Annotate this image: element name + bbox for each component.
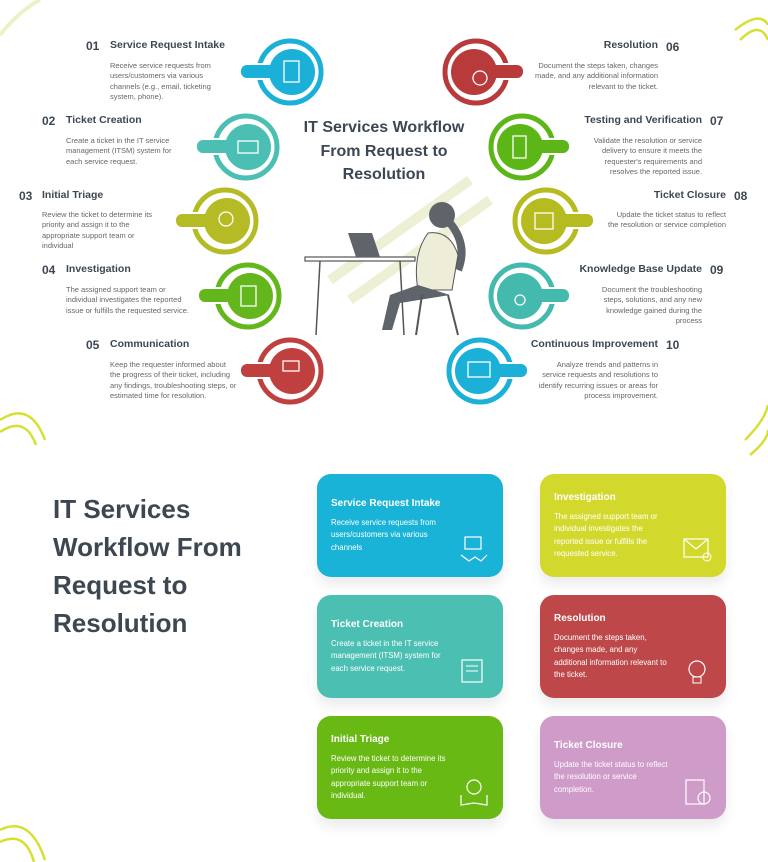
card: Investigation: The assigned support team or individual investigates the reported issue or fulfills the requested service.	[554, 512, 658, 558]
step 02	[42, 114, 172, 166]
text: 06	[666, 40, 679, 54]
text: Knowledge Base Update	[579, 263, 702, 275]
card: Service Request Intake	[317, 474, 503, 577]
text: 07	[710, 114, 723, 128]
text: 02	[42, 114, 55, 128]
card: Resolution: Resolution	[554, 613, 606, 624]
card: Ticket Closure: Update the ticket status to reflect the resolution or service completion.	[554, 760, 668, 794]
text: 03	[19, 189, 32, 203]
card: Initial Triage: Review the ticket to determine its priority and assign it to the appropriate support team or individual.	[331, 754, 445, 800]
text: 10	[666, 338, 679, 352]
card: Initial Triage: Initial Triage	[331, 734, 389, 745]
text: Keep the requester informed about the progress of their ticket, including any findings, troubleshooting steps, or estimated time for resolution.	[110, 360, 236, 400]
text: Validate the resolution or service delivery to ensure it meets the requester's requirements and resolves the reported issue.	[594, 136, 702, 176]
step 04	[42, 263, 189, 315]
card: Service Request Intake: Receive service requests from users/customers via various channels	[331, 518, 436, 552]
card: Resolution: Document the steps taken, changes made, and any additional information relevant to the ticket.	[554, 633, 667, 679]
card: Investigation	[540, 474, 726, 577]
card: Investigation: Investigation	[554, 492, 616, 503]
step 09	[579, 263, 723, 325]
text: Update the ticket status to reflect the resolution or service completion	[608, 210, 726, 229]
text: 01	[86, 39, 99, 53]
text: Document the steps taken, changes made, and any additional information relevant to the ticket.	[535, 61, 658, 91]
text: Investigation	[66, 263, 131, 275]
circles: workflow icons	[176, 38, 593, 404]
text: Analyze trends and patterns in service requests and resolutions to identify recurring issues or areas for process improvement.	[539, 360, 658, 400]
text: Ticket Creation	[66, 114, 142, 126]
title: bottom: IT Services Workflow From Request to Resolution	[53, 494, 242, 638]
text: 04	[42, 263, 55, 277]
text: Create a ticket in the IT service management (ITSM) system for each service request.	[66, 136, 171, 166]
text: Communication	[110, 338, 189, 350]
step 06	[535, 39, 679, 91]
text: Receive service requests from users/customers via various channels (e.g., email, ticketing system, phone).	[110, 61, 211, 101]
card: Ticket Creation: Create a ticket in the IT service management (ITSM) system for each service request.	[331, 639, 441, 673]
step 01	[86, 39, 225, 101]
text: Service Request Intake	[110, 39, 225, 51]
text: Document the troubleshooting steps, solutions, and any new knowledge gained during the process	[602, 285, 702, 325]
text: Resolution	[604, 39, 658, 51]
card: Service Request Intake: Service Request Intake	[331, 498, 440, 509]
text: Ticket Closure	[654, 189, 726, 201]
text: The assigned support team or individual investigates the reported issue or fulfills the requested service.	[66, 285, 189, 315]
text: 05	[86, 338, 99, 352]
step 05	[86, 338, 236, 400]
text: Initial Triage	[42, 189, 103, 201]
text: Testing and Verification	[584, 114, 702, 126]
step 08	[608, 189, 747, 229]
text: 08	[734, 189, 747, 203]
card: Initial Triage	[317, 716, 503, 819]
card: Ticket Creation	[317, 595, 503, 698]
illustration: person at desk	[304, 202, 466, 336]
card: Ticket Creation: Ticket Creation	[331, 619, 403, 630]
text: Continuous Improvement	[531, 338, 658, 350]
text: 09	[710, 263, 723, 277]
card: Resolution	[540, 595, 726, 698]
step 03	[19, 189, 152, 250]
step 07	[584, 114, 723, 176]
step 10	[531, 338, 679, 400]
title: top: IT Services Workflow From Request to Resolution	[304, 119, 464, 183]
text: Review the ticket to determine its priority and assign it to the appropriate support team or individual	[42, 210, 152, 250]
card: Ticket Closure	[540, 716, 726, 819]
card: Ticket Closure: Ticket Closure	[554, 740, 623, 751]
